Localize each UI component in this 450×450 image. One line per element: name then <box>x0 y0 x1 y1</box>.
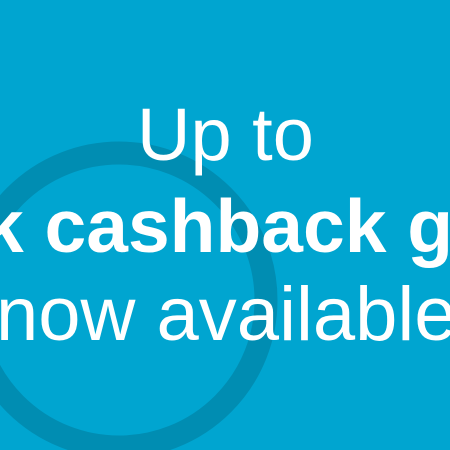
text: now available: now available <box>0 272 450 357</box>
text: up to: Up to <box>137 93 314 176</box>
